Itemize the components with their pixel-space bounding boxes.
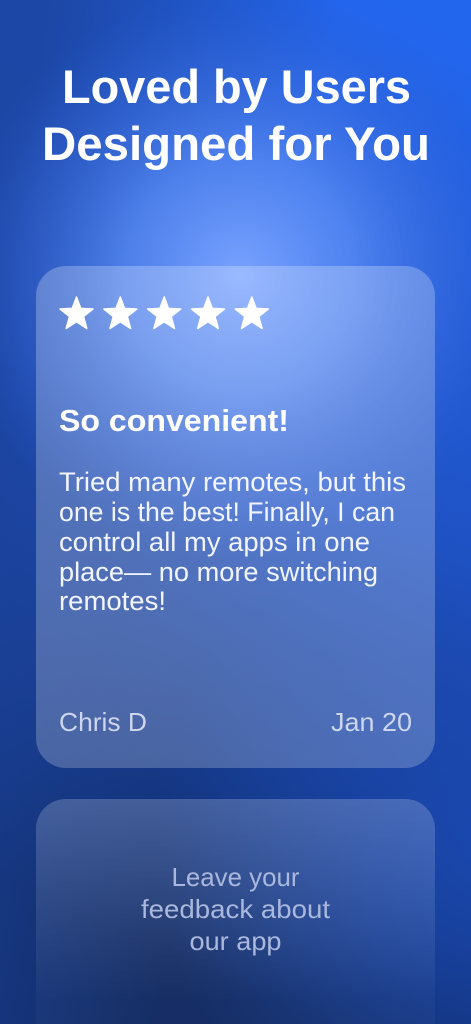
- panel: feedback card: [36, 799, 435, 1024]
- reviewer name: Chris D: [59, 707, 147, 737]
- feedback prompt: Leave your: [172, 862, 300, 892]
- title: Designed for You: [42, 117, 430, 170]
- review heading: So convenient!: [59, 403, 289, 438]
- title: [42, 60, 430, 170]
- title: Loved by Users: [62, 60, 411, 113]
- review body: Tried many remotes, but this: [59, 467, 406, 497]
- feedback prompt: [141, 862, 331, 956]
- feedback prompt: our app: [190, 926, 282, 956]
- review body: control all my apps in one: [59, 527, 370, 557]
- review body: place— no more switching: [59, 557, 378, 587]
- panel: review card: [36, 266, 435, 768]
- icon: five star rating: [60, 297, 268, 328]
- review body: one is the best! Finally, I can: [59, 497, 395, 527]
- feedback prompt: feedback about: [141, 894, 331, 924]
- review date: Jan 20: [331, 707, 412, 737]
- review body: remotes!: [59, 586, 166, 616]
- review body: [59, 467, 406, 616]
